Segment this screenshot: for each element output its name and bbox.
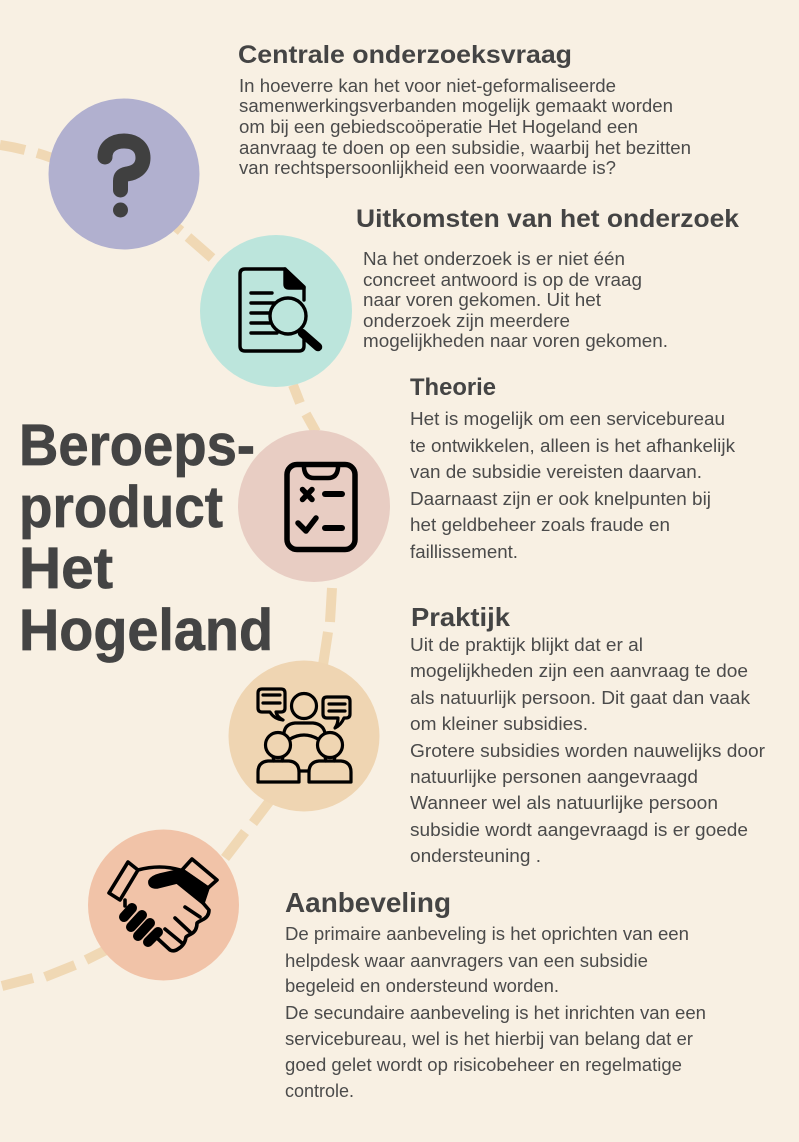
icon: document with magnifier: [240, 269, 318, 351]
body text: outcomes: Na het onderzoek is er niet één: [363, 249, 625, 269]
body text: central research question: In hoeverre kan het voor niet-geformaliseerde: [239, 76, 616, 96]
body text: practice: als natuurlijk persoon. Dit gaat dan vaak: [410, 688, 751, 708]
dashed connecting path: [0, 145, 332, 986]
body text: central research question: [239, 76, 691, 178]
title: Beroeps-: [19, 413, 255, 478]
heading: outcomes: Uitkomsten van het onderzoek: [356, 205, 739, 233]
body text: practice: Wanneer wel als natuurlijke persoon: [410, 793, 718, 813]
title: Hogeland: [19, 598, 273, 663]
body text: practice: [410, 635, 765, 866]
body text: central research question: aanvraag te doen op een subsidie, waarbij het bezitten: [239, 138, 691, 158]
body text: practice: ondersteuning .: [410, 846, 541, 866]
body text: practice: Uit de praktijk blijkt dat er al: [410, 635, 643, 655]
icon: clipboard checklist: [287, 464, 355, 550]
body text: recommendation: De secundaire aanbeveling is het inrichten van een: [285, 1003, 706, 1023]
body text: practice: om kleiner subsidies.: [410, 714, 588, 734]
title: Het: [19, 536, 113, 601]
heading: theory: Theorie: [410, 374, 496, 401]
icon: handshake: [109, 859, 217, 951]
body text: recommendation: servicebureau, wel is het hierbij van belang dat er: [285, 1029, 693, 1049]
body text: recommendation: helpdesk waar aanvragers van een subsidie: [285, 951, 648, 971]
body text: central research question: samenwerkingsverbanden mogelijk gemaakt worden: [239, 96, 673, 116]
body text: outcomes: naar voren gekomen. Uit het: [363, 290, 601, 310]
circle: recommendation: [88, 830, 239, 980]
text block: recommendation: [285, 887, 706, 1101]
circle: theory: [238, 430, 390, 582]
text block: outcomes: [356, 205, 739, 351]
title: [19, 413, 273, 663]
body text: outcomes: concreet antwoord is op de vraag: [363, 270, 642, 290]
body text: practice: natuurlijke personen aangevraagd: [410, 767, 698, 787]
body text: recommendation: [285, 924, 706, 1101]
circle: outcomes: [200, 235, 352, 387]
body text: theory: het geldbeheer zoals fraude en: [410, 515, 670, 535]
body text: outcomes: mogelijkheden naar voren gekomen.: [363, 331, 668, 351]
body text: theory: te ontwikkelen, alleen is het afhankelijk: [410, 436, 736, 456]
body text: theory: [410, 409, 736, 562]
body text: recommendation: controle.: [285, 1081, 354, 1101]
heading: practice: Praktijk: [411, 602, 511, 632]
body text: practice: Grotere subsidies worden nauwelijks door: [410, 741, 765, 761]
body text: theory: faillissement.: [410, 542, 518, 562]
circle: practice: [228, 660, 380, 812]
text block: theory: [410, 374, 736, 562]
heading: recommendation: Aanbeveling: [285, 887, 451, 918]
body text: theory: Het is mogelijk om een servicebureau: [410, 409, 725, 429]
body text: recommendation: begeleid en ondersteund worden.: [285, 976, 559, 996]
text block: practice: [410, 602, 765, 866]
text block: central research question: [238, 41, 691, 178]
body text: theory: Daarnaast zijn er ook knelpunten bij: [410, 489, 711, 509]
body text: outcomes: [363, 249, 668, 351]
body text: recommendation: goed gelet wordt op risicobeheer en regelmatige: [285, 1055, 682, 1075]
heading: central research question: Centrale onderzoeksvraag: [238, 41, 572, 69]
body text: practice: subsidie wordt aangevraagd is er goede: [410, 820, 748, 840]
icon: people talking: [258, 689, 351, 782]
body text: recommendation: De primaire aanbeveling is het oprichten van een: [285, 924, 689, 944]
body text: outcomes: onderzoek zijn meerdere: [363, 311, 570, 331]
body text: practice: mogelijkheden zijn een aanvraag te doe: [410, 661, 748, 681]
title: product: [19, 475, 223, 540]
body text: central research question: van rechtspersoonlijkheid een voorwaarde is?: [239, 158, 616, 178]
circle: question: [48, 98, 200, 250]
body text: theory: van de subsidie vereisten daarvan.: [410, 462, 702, 482]
icon: question mark: [105, 141, 143, 218]
body text: central research question: om bij een gebiedscoöperatie Het Hogeland een: [239, 117, 638, 137]
